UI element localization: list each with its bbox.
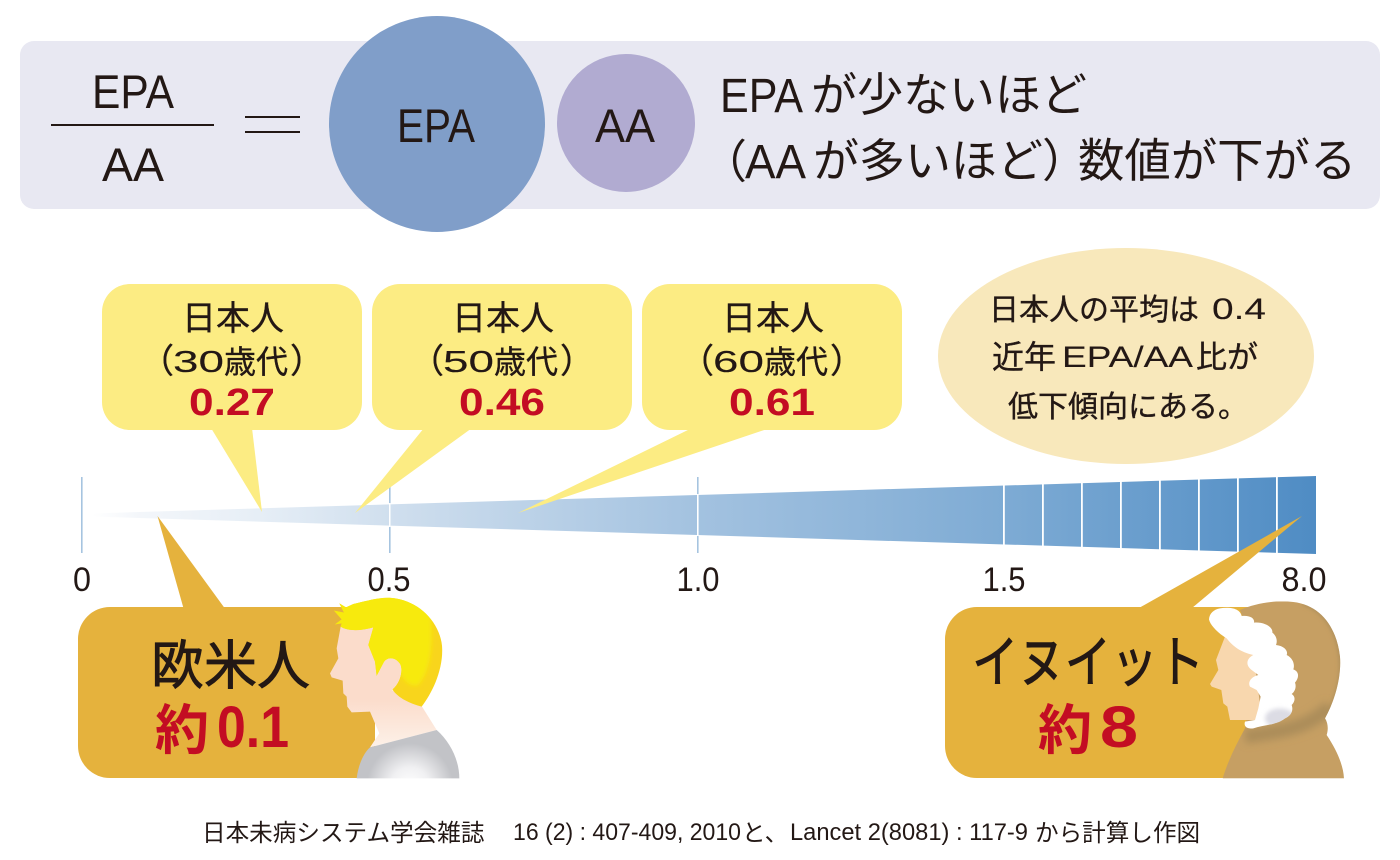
circle: EPA [329,16,545,232]
callout: Japanese 30s: 歳代 [224,344,288,380]
source citation: から計算し作図 [1035,820,1200,847]
tapered gradient bar [92,476,1316,554]
callout: Westerners: 0.1 [217,695,289,760]
callout: Japanese 30s: 日本人 [182,300,284,338]
callout: average note ellipse: 日本人の平均は [989,294,1199,327]
callout: Westerners: 欧米人 [151,637,310,696]
segment separators [1003,470,1278,560]
callout: average note ellipse: EPA/AA [1062,341,1193,374]
callout: Japanese 50s: 歳代 [494,344,558,380]
circle: EPA: EPA [397,99,476,152]
face [1210,637,1262,720]
callout: Japanese 60s: 歳代 [764,344,828,380]
callout: Westerners [78,516,375,778]
callout: average note ellipse: 低下傾向にある。 [1008,391,1248,424]
explanation text: （ [701,136,747,188]
callout: Japanese 30s: 0.27 [189,382,275,424]
callout: Japanese 30s: 30 [173,344,224,379]
source citation [202,820,1200,847]
callout: Inuit [945,516,1302,778]
callout: Japanese 50s: 0.46 [459,382,545,424]
scale labels: 0.5 [368,561,410,599]
callout: Japanese 30s [102,284,362,512]
scale labels: 1.5 [982,561,1026,599]
explanation text: 数値が下がる [1078,135,1356,187]
scale bar [73,470,1326,599]
source citation: と、 [742,821,788,847]
callout: Japanese 30s: （ [140,343,174,381]
icon: Western man in profile [330,598,460,778]
shirt [357,730,459,778]
callout: Japanese 50s [355,284,632,513]
source citation: 日本未病システム学会雑誌 [202,820,484,847]
callout: Japanese 50s: 日本人 [452,300,554,338]
callout: Japanese 60s: 日本人 [722,300,824,338]
callout: Inuit: 約 [1038,701,1092,761]
callout: average note ellipse [938,248,1314,464]
neck and face [330,627,437,747]
source citation: Lancet 2(8081) : 117-9 [790,820,1028,846]
formula: EPA over AA: EPA [92,65,175,118]
callout: average note ellipse: 0.4 [1212,293,1266,326]
callout: Japanese 30s: ） [290,343,324,381]
callout: Japanese 50s: （ [410,343,444,381]
source citation: 16 (2) : 407-409, 2010 [513,820,741,846]
explanation text: AA [745,136,806,189]
explanation text: が多いほど [813,135,1043,187]
callout: Japanese 50s: ） [560,343,594,381]
ear [377,658,401,690]
scale labels: 0 [73,561,91,599]
callout: Inuit: 8 [1100,695,1138,760]
circle: AA [557,54,695,192]
callout: Japanese 50s: 50 [443,344,494,379]
panel: formula banner [20,16,1380,232]
callout: Japanese 60s [518,284,902,513]
callout: average note ellipse: 比が [1196,340,1258,375]
scale labels: 1.0 [676,561,720,599]
scale labels [73,561,1326,599]
callout: average note ellipse: 近年 [992,339,1056,375]
callout: Westerners: 約 [155,701,209,761]
callout: Japanese 60s: 60 [713,344,764,379]
circle: AA: AA [595,99,656,152]
callout: Japanese 60s: 0.61 [729,382,815,424]
scale labels: 8.0 [1282,561,1326,599]
explanation text: EPA [720,70,803,123]
tick marks [81,477,699,553]
equals sign [245,116,300,133]
hood and parka [1220,598,1347,780]
hair [334,598,442,706]
formula: EPA over AA [51,65,214,191]
callout: Japanese 60s: ） [830,343,864,381]
explanation text: ） [1042,135,1088,187]
explanation text [701,69,1356,189]
icon: Inuit in fur hood [1207,598,1347,780]
callout: Inuit: イヌイット [972,631,1204,694]
callout: Japanese 60s: （ [680,343,714,381]
fur trim [1209,608,1298,728]
formula: EPA over AA: AA [102,138,165,191]
explanation text: が少ないほど [811,69,1087,121]
